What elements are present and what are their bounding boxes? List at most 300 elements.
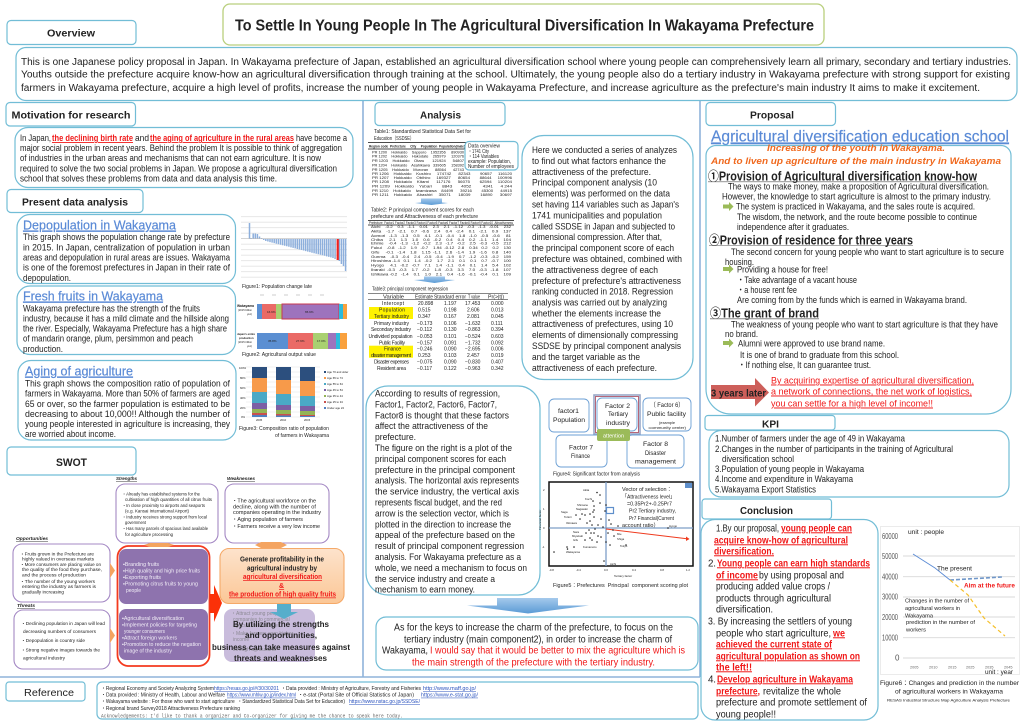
panel: analysis description: called SSDSE in Japan and subjected to bbox=[532, 220, 675, 231]
table 3: principal component regression: 0.106 bbox=[444, 321, 457, 327]
panel: SWOT strengths: ・Industry receives strong support from local bbox=[122, 514, 207, 520]
chart: prefecture principal component scoring plot: Tertiary factor bbox=[614, 574, 632, 578]
item 3: brand: ③The grant of brand bbox=[710, 306, 819, 320]
table 1: SSDSE data: PR 1205 Hokkaido Muroran 88564 42743 bbox=[372, 167, 465, 172]
table 3: principal component regression: 0.090 bbox=[444, 360, 457, 366]
panel: depopulation in Wakayama: This graph shows the population change rate by prefecture bbox=[23, 232, 230, 242]
panel: fresh fruits in Wakayama: the river. Especially, Wakayama Prefecture has a high share bbox=[23, 324, 227, 334]
panel: aging of agriculture: farmers in Wakayama. More than 50% of farmers are aged bbox=[25, 389, 230, 399]
table 3: principal component regression: 0.122 bbox=[444, 366, 457, 372]
panel: references: https://www.e-stat.go.jp/ bbox=[421, 693, 479, 699]
table 2: principal component scores: Aichi -0.2 0.3 -1.1 0.01 2.3 2.1 -1.12 -0.3 -1.3 -0.01 232 bbox=[371, 224, 512, 229]
strategy box: strengths x opportunities: ▪Exporting fruits bbox=[123, 575, 161, 581]
panel: keys to increase the charm: Wakayama, bbox=[382, 646, 428, 656]
table 2: principal component scores: Chiba 2.1 1.3 1.0 0.6 -0.2 0.4 0.4 0.2 -1.1 1.4 104 bbox=[371, 237, 512, 242]
panel: motivation text: major social problem in recent years. Behind the problem It is possible to think of aggregation bbox=[20, 143, 342, 153]
panel: conclusion text bbox=[701, 520, 878, 720]
table 3: principal component regression: −0.117 bbox=[417, 366, 432, 372]
arrow: table 1 to table 2 bbox=[415, 198, 448, 205]
factor 7 bbox=[556, 435, 607, 467]
table 3: principal component regression: Finance bbox=[384, 346, 401, 352]
chart: agricultural output value: 35.8% bbox=[268, 339, 277, 343]
table 3: principal component regression: 0.092 bbox=[491, 340, 504, 346]
panel: references: https://www.mhlw.go.jp/index.html bbox=[227, 693, 296, 699]
panel: references bbox=[97, 682, 698, 720]
heading: conclusion bbox=[702, 499, 832, 519]
panel: keys to increase the charm: tertiary industry (main component2), in order to increase the charm of bbox=[404, 634, 672, 645]
panel: conclusion text: products through agricultural bbox=[716, 593, 831, 604]
factor 1: Population bbox=[553, 417, 585, 424]
panel: conclusion text: producing added value crops / bbox=[716, 581, 830, 592]
table 3: principal component regression: 17.453 bbox=[465, 301, 481, 307]
factor 1: factor1 bbox=[558, 408, 579, 415]
table 3: principal component regression: 0.000 bbox=[491, 301, 504, 307]
panel: generate profitability: agricultural industry by bbox=[247, 566, 317, 572]
table 3: principal component regression: Variable bbox=[383, 294, 404, 300]
chart: agricultural workers prediction: Changes in the number of bbox=[905, 598, 970, 604]
table 2: principal component scores: Ishikawa -0.2 -1.4 0.1 1.0 2.1 0.4 -1.6 -0.1 -0.4 0.1 109 bbox=[371, 272, 512, 276]
panel: depopulation in Wakayama: is one of the foremost prefectures in Japan in their rate of bbox=[23, 263, 231, 273]
chart: composition ratio of farmers by age: Age 70 and older bbox=[327, 370, 348, 374]
panel: references: https://resas.go.jp/#/30/30201 bbox=[214, 686, 279, 692]
heading: present data analysis bbox=[7, 190, 143, 212]
table 2: principal component scores: Gifu -0.1 -1.4 1.8 1.15 -1.1 2.6 -1.4 1.9 -1.6 0.8 140 bbox=[371, 250, 512, 254]
panel: SWOT strengths: ・Has many parcels of spacious land available bbox=[122, 526, 209, 531]
panel: SWOT strengths: (e.g. Kansai International Airport) bbox=[125, 508, 190, 514]
panel: fresh fruits in Wakayama bbox=[17, 286, 236, 354]
table 3: principal component regression: Standard error bbox=[434, 294, 466, 300]
chart: composition ratio of farmers by age: 40% bbox=[240, 396, 246, 400]
callout: data overview: ・114 Variables bbox=[468, 154, 499, 160]
panel: conclusion text: revitalize the whole bbox=[763, 686, 842, 697]
table 3: principal component regression: disaster management bbox=[371, 353, 412, 359]
panel: regression results description: prefecture. bbox=[375, 431, 416, 442]
table 3: principal component regression: −0.173 bbox=[417, 321, 433, 327]
panel: measures against threats and weaknesses: By utilizing the strengths bbox=[233, 620, 330, 629]
chart: agricultural workers prediction: 2010 bbox=[929, 666, 937, 670]
chart: agricultural output value: 65.9% bbox=[305, 310, 314, 314]
item 1: know-how: The ways to make money, make a proposition of Agricultural diversification. bbox=[728, 181, 989, 191]
caption: figure 6: of agricultural workers in Wakayama bbox=[895, 688, 1004, 696]
heading: overview: Overview bbox=[47, 28, 95, 40]
panel: conclusion text: we bbox=[832, 628, 845, 639]
panel: SWOT weaknesses: ・Farmers receive a very low income bbox=[232, 524, 320, 530]
panel: SWOT strengths bbox=[116, 476, 218, 543]
table 3: principal component regression: 0.130 bbox=[444, 327, 457, 333]
arrow: analysis to keys bbox=[467, 598, 589, 614]
panel: regression results description: appeal of the prefecture based on the bbox=[375, 529, 515, 540]
panel: SWOT opportunities: entering the industry as farmers is bbox=[22, 584, 97, 589]
callout: data overview: Number of employees bbox=[468, 164, 514, 170]
panel: references: ・Data provided : Ministry of Health, Labour and Welfare bbox=[101, 693, 225, 699]
callout: 3 years later: a network of connections, the net work of logistics, bbox=[771, 386, 972, 398]
callout: data overview: example: Population, bbox=[468, 159, 511, 165]
table 3: principal component regression: 2.457 bbox=[467, 353, 480, 359]
panel: SWOT opportunities: the quality of the food they purchase, bbox=[22, 567, 102, 572]
panel: regression results description: whole, we need a mechanism to focus on bbox=[374, 562, 527, 573]
panel: regression results description: The figure on the right is a plot of the bbox=[375, 442, 512, 453]
table 3: principal component regression: 0.603 bbox=[491, 334, 504, 340]
heading: proposal: Proposal bbox=[750, 110, 794, 122]
panel: SWOT weaknesses: ・The agricultural workforce on the bbox=[232, 499, 316, 505]
callout: data overview: Data overview bbox=[468, 144, 500, 150]
attention tag: attention bbox=[603, 434, 624, 440]
panel: regression results description: affect the attractiveness of the bbox=[375, 420, 488, 431]
item 1: know-how: ①Provision of Agricultural diversification know-how bbox=[708, 170, 977, 184]
table 1: SSDSE data: PR 1211 Hokkaido Abashiri 35071 18039 16890 30697 bbox=[372, 192, 513, 197]
chart: prefecture principal component scoring plot: Aichi bbox=[610, 562, 616, 566]
factor 1 bbox=[549, 399, 589, 432]
item 2: residence: Are coming from by the funds which is earned in Wakayama brand. bbox=[737, 295, 967, 305]
chart: agricultural output value: 17.0% bbox=[317, 339, 326, 343]
panel: measures against threats and weaknesses: ・Attract young people to bbox=[231, 611, 288, 617]
factor 2: industry bbox=[606, 420, 631, 427]
panel: SWOT opportunities: gradually increasing bbox=[22, 590, 64, 594]
callout: 3 years later: 3 years later bbox=[711, 388, 766, 400]
chart: prefecture principal component scoring plot: Shiga bbox=[617, 537, 625, 541]
caption: table 2: Table2: P principal component scores for each bbox=[371, 208, 474, 214]
strategy box: strengths x threats: younger consumers bbox=[124, 629, 165, 635]
chart: agricultural workers prediction: 2025 bbox=[966, 666, 974, 670]
chart: agricultural workers prediction: 60000 bbox=[882, 532, 898, 541]
panel: regression results description: Factor1, Factor2, Factor6, Factor7, bbox=[375, 398, 497, 409]
chart: prefecture principal component scoring plot: 2 bbox=[543, 488, 545, 492]
chart: prefecture principal component scoring plot: -0.4 bbox=[576, 568, 581, 572]
callout: vector of selection: =0.35Pr2+-0.25Pr7 bbox=[627, 502, 672, 508]
chart: prefecture principal component scoring plot: Financial factor bbox=[538, 510, 542, 530]
chart: agricultural workers prediction: agricultural workers in bbox=[905, 606, 960, 612]
panel: fresh fruits in Wakayama: production. bbox=[23, 344, 63, 354]
panel: motivation text: have become a bbox=[296, 133, 347, 143]
panel: conclusion text: diversification. bbox=[714, 546, 774, 557]
chart: prefecture principal component scoring plot: 1.2 bbox=[686, 568, 690, 572]
table 2: principal component scores: Hiroshima -1.4 0.1 1.4 -0.2 1.7 2.1 0.1 0.1 0.7 -0.7 100 bbox=[371, 258, 512, 263]
factor 7: Finance bbox=[571, 453, 590, 460]
heading: KPI bbox=[705, 416, 835, 430]
panel: SWOT threats bbox=[14, 603, 110, 669]
chart: prefecture principal component scoring plot: Nara bbox=[573, 530, 580, 534]
heading: overview bbox=[7, 20, 136, 44]
factor 8 bbox=[627, 435, 684, 468]
panel: overview text: Youths outside the prefecture acquire know-how an agricultural diversification through training at the school. Ultimately, the young people also do a tertiary industry in Wakayama prefecture with strong support for existing bbox=[21, 70, 1010, 80]
caption: figure 3: Figure3: Composition ratio of population bbox=[239, 426, 329, 432]
chart: composition ratio of farmers by age: 80% bbox=[240, 376, 246, 380]
panel: KPI list: 1.Number of farmers under the age of 49 in Wakayama bbox=[715, 434, 905, 444]
chart: prefecture principal component scoring plot: Mie bbox=[617, 532, 622, 536]
table 3: principal component regression: −2.695 bbox=[465, 346, 481, 352]
caption: table 3: Table3: principal component regression bbox=[372, 286, 448, 292]
strategy box: strengths x threats: ▪Implement policies for targeting bbox=[122, 622, 197, 628]
table 2: principal component scores: prefecture and Attractiveness of each prefecture bbox=[371, 214, 478, 220]
table 3: principal component regression: Secondary industry bbox=[371, 327, 412, 333]
table 3: principal component regression: Primary industry bbox=[374, 321, 410, 327]
heading: SWOT: SWOT bbox=[56, 457, 87, 469]
panel: analysis description: prefecture was obtained, combined with bbox=[532, 253, 682, 264]
panel: conclusion text: 1.By our proposal, bbox=[716, 523, 779, 534]
chart: agricultural workers prediction: workers bbox=[906, 628, 927, 634]
panel: motivation text: and bbox=[135, 133, 149, 143]
table 3: principal component regression: −1.732 bbox=[465, 340, 481, 346]
caption: figure 2: Figure2: Agricultural output value bbox=[242, 352, 316, 358]
panel: SWOT threats: Threats bbox=[17, 603, 36, 608]
chart: prefecture principal component scoring plot: Kumamoto bbox=[583, 545, 597, 549]
chart: agricultural output value: Japan's entire bbox=[237, 332, 255, 336]
chart: composition ratio of farmers by age: Age 25 to 34 bbox=[327, 400, 343, 404]
table 2: principal component scores: Ibaraki -0.3 -0.3 1.7 -0.2 1.8 -0.3 3.3 7.0 -0.3 -1.8 107 bbox=[371, 267, 512, 272]
panel: SWOT opportunities bbox=[13, 536, 110, 602]
table 3: principal component regression: Estimate bbox=[415, 294, 433, 300]
chart: agricultural workers prediction: 2045 bbox=[1004, 666, 1012, 670]
chart: composition ratio of farmers by age: 100% bbox=[239, 366, 247, 370]
factor 6: Public facility bbox=[647, 411, 687, 418]
panel: SWOT opportunities: Opportunities bbox=[16, 536, 49, 541]
item 3: brand: Alumni were approved to use brand name. bbox=[738, 338, 885, 348]
panel: conclusion text: Young people can earn high standards bbox=[717, 558, 870, 569]
heading: analysis bbox=[375, 102, 505, 126]
panel: SWOT opportunities: ・The number of the young workers bbox=[20, 579, 96, 584]
chart: agricultural output value: Wakayama bbox=[237, 304, 254, 308]
panel: analysis description: 1741 municipalities and population bbox=[532, 209, 662, 220]
table 3: principal component regression: Resident area bbox=[377, 366, 406, 372]
heading: fresh fruits: Fresh fruits in Wakayama bbox=[23, 288, 164, 304]
panel: analysis description: Here we conducted a series of analyzes bbox=[532, 144, 677, 155]
panel: conclusion text: young people can bbox=[781, 523, 852, 534]
aim statement bbox=[710, 143, 1001, 167]
heading: agricultural diversification education school: Agricultural diversification education school bbox=[711, 128, 1009, 146]
panel: regression results description: the service industry and create a bbox=[375, 573, 496, 584]
item 3: brand: ・If nothing else, It can guarantee trust. bbox=[738, 360, 871, 370]
panel: conclusion text: prefecture and promote settlement of bbox=[716, 697, 867, 708]
panel: analysis description: attractiveness of prefectures, using 10 bbox=[532, 318, 673, 329]
chart: prefecture principal component scoring plot: -1 bbox=[542, 545, 545, 549]
panel: regression results description: analysis. For Wakayama prefecture as a bbox=[375, 551, 522, 562]
chart: composition ratio of farmers by age: Age 35 to 44 bbox=[327, 394, 343, 398]
panel: measures against threats and weaknesses: companies to commercial bbox=[233, 617, 290, 623]
table 3: principal component regression: −0.963 bbox=[465, 366, 481, 372]
chart: agricultural workers prediction: 10000 bbox=[882, 634, 898, 643]
aim statement: Increasing of the youth in Wakayama. bbox=[767, 143, 945, 154]
caption: figure 6: Figure6：Changes and prediction in the number bbox=[880, 680, 1019, 687]
chart: prefecture principal component scoring plot: Miyazaki bbox=[572, 534, 583, 538]
panel: conclusion text: Develop agriculture in Wakayama bbox=[717, 674, 853, 685]
chart: agricultural workers prediction: Wakayama bbox=[905, 614, 933, 620]
arrow: blue down arrow bbox=[270, 604, 298, 619]
table 1: SSDSE data: PR 1210 Hokkaido Iwamizawa 84499 39216 45300 44915 bbox=[372, 188, 513, 193]
panel: measures against threats and weaknesses: agricultural industries bbox=[233, 623, 281, 629]
chart: prefecture principal component scoring plot: Gifu bbox=[573, 538, 579, 542]
panel: conclusion text: 3. By increasing the settlers of young bbox=[708, 616, 852, 627]
heading: KPI: KPI bbox=[762, 420, 779, 430]
panel: regression results description bbox=[366, 386, 540, 595]
table 3: principal component regression: Undivided population bbox=[368, 334, 413, 340]
chart: composition ratio of farmers by age: Age 65 to 74 bbox=[327, 376, 343, 380]
panel: aging of agriculture: are worried about income. bbox=[25, 429, 116, 439]
panel: conclusion text: diversification. bbox=[716, 604, 773, 615]
heading: SWOT bbox=[7, 447, 136, 475]
panel: regression results description: prefecture in the principal component bbox=[375, 464, 515, 475]
table 2: principal component scores: Ehime -0.4 -1.3 -1.2 -0.2 2.3 -1.7 -0.2 2.5 -0.3 -0.5 212 bbox=[371, 241, 512, 246]
panel: conclusion text: agricultural population as shown on bbox=[716, 651, 860, 662]
chart: composition ratio of farmers by age: 2015 bbox=[304, 418, 311, 422]
item 1: know-how: The wisdom, the network, and the route become possible to continue bbox=[737, 212, 977, 222]
chart: agricultural output value: (2015 billion bbox=[238, 308, 253, 312]
panel: references: ・Data provided : Ministry of Agriculture, Forestry and Fisheries bbox=[281, 686, 421, 692]
panel: measures against threats and weaknesses: and opportunities, bbox=[245, 631, 317, 640]
chart: composition ratio of farmers by age: 0% bbox=[241, 415, 246, 419]
panel: analysis description: SSDSE by principal component analysis bbox=[532, 340, 681, 351]
table 3: principal component regression: 0.198 bbox=[444, 308, 457, 314]
panel: keys to increase the charm: As for the keys to increase the charm of the prefecture, to focus on the bbox=[394, 622, 674, 633]
panel: SWOT threats: agricultural industry bbox=[23, 656, 66, 660]
table 1: SSDSE data: PR 1209 Hokkaido Yubari 8843 4052 4341 4 244 bbox=[372, 184, 513, 188]
table 3: principal component regression: 0.394 bbox=[491, 327, 504, 333]
panel: SWOT weaknesses bbox=[225, 476, 329, 543]
callout: vector of selection: Pr2 Tertiary industry, bbox=[629, 508, 676, 514]
chart: agricultural workers prediction bbox=[880, 526, 1020, 676]
panel: analysis description: set having 114 variables such as Japan's bbox=[532, 198, 679, 210]
panel: analysis description: prefecture of prefecture's attractiveness bbox=[532, 275, 681, 286]
panel: KPI list: diversification school bbox=[722, 454, 794, 464]
factor 6: （ Factor 6） bbox=[650, 401, 684, 409]
panel: regression results description: result of principal component regression bbox=[375, 540, 524, 551]
chart: prefecture principal component scoring plot: Okinawa bbox=[566, 521, 577, 525]
table 3: principal component regression: 0.090 bbox=[444, 346, 457, 352]
panel: depopulation in Wakayama: areas and depopulation in rural areas are issues. Wakayama bbox=[23, 252, 230, 262]
caption: table 1: Table1: Standardized Statistical Data Set for bbox=[374, 129, 471, 135]
panel: overview text bbox=[16, 48, 1017, 100]
table 3: principal component regression: 2.081 bbox=[467, 314, 480, 320]
table 2: principal component scores: Prefecture Factor1 Factor2 Factor3 Factor4 Factor5 Factor6 Factor7 Factor8 Factor9 Factor10 Attractiveness bbox=[369, 221, 513, 225]
chart: prefecture principal component scoring plot: Akita bbox=[583, 488, 590, 492]
table 3: principal component regression: 0.045 bbox=[491, 314, 504, 320]
chart: agricultural output value: 16.9% bbox=[267, 310, 276, 314]
table 3: principal component regression: 0.253 bbox=[418, 353, 431, 359]
factor 8: management bbox=[635, 458, 676, 466]
table 3: principal component regression: 0.019 bbox=[491, 353, 504, 359]
chart: composition ratio of farmers by age: Under age 24 bbox=[327, 406, 344, 410]
panel: SWOT strengths: government bbox=[125, 520, 147, 525]
panel: regression results description: plotted in the direction to increase the bbox=[375, 518, 511, 529]
panel: KPI list: 5.Wakayama Export Statistics bbox=[715, 484, 816, 494]
table 3: principal component regression: 0.167 bbox=[444, 314, 457, 320]
factor 8: Factor 8 bbox=[643, 441, 668, 448]
panel: generate profitability: agricultural diversification bbox=[243, 574, 322, 581]
panel: aging of agriculture: 65 or over, so the farmer population is estimated to be bbox=[25, 399, 230, 409]
chart: agricultural workers prediction: Aim at the future bbox=[964, 582, 1015, 590]
panel: SWOT opportunities: and the process of production bbox=[22, 572, 86, 578]
item 1: know-how: independence after it graduates. bbox=[737, 222, 849, 232]
panel: regression results description: arrow is the selection vector, which is bbox=[375, 507, 509, 518]
table 3: principal component regression: 1.197 bbox=[444, 301, 457, 307]
chart: prefecture principal component scoring plot: Tottori bbox=[564, 515, 572, 519]
chart: agricultural output value: production bbox=[239, 336, 254, 340]
item 2: residence: Providing a house for free! bbox=[737, 264, 828, 274]
panel: SWOT weaknesses: ・Aging population of farmers bbox=[232, 517, 304, 523]
panel: measures against threats and weaknesses bbox=[212, 604, 350, 663]
table 3: principal component regression: Pr(>|t|) bbox=[488, 294, 504, 300]
panel: analysis description: the principal component score of each bbox=[532, 242, 674, 253]
panel: conclusion text: the left!! bbox=[716, 662, 752, 673]
chart: prefecture principal component scoring plot: -0.8 bbox=[549, 568, 554, 572]
chart: agricultural workers prediction: The present bbox=[937, 566, 972, 572]
chart: agricultural workers prediction: 2015 bbox=[948, 666, 956, 670]
table 1: SSDSE data: Education（SSDSE） bbox=[374, 135, 414, 142]
chart: prefecture principal component scoring plot: 0 bbox=[543, 526, 545, 530]
table 2: principal component scores bbox=[368, 208, 514, 276]
chart: agricultural output value: yen) bbox=[247, 344, 252, 348]
chart: agricultural workers prediction: 20000 bbox=[882, 613, 898, 622]
chart: prefecture principal component scoring plot: 0.0 bbox=[604, 568, 608, 572]
panel: conclusion text: achieved the current state of bbox=[716, 639, 833, 650]
panel: motivation text: of industries in the urban areas and mechanisms that can not earn agriculture. It is now bbox=[20, 153, 322, 163]
factor 6: :community center) bbox=[648, 426, 686, 430]
panel: SWOT opportunities: ・More consumers are placing value on bbox=[20, 562, 101, 567]
table 2: principal component scores: Aomori -1.3 -1.3 0.5 4.1 -0.1 -0.4 1.8 -1.0 -0.5 -0.6 81 bbox=[371, 233, 512, 238]
panel: proposal details bbox=[706, 143, 1011, 414]
heading: reference bbox=[6, 682, 85, 701]
panel: fresh fruits in Wakayama: of mandarin orange, plum, persimmon and peach bbox=[23, 334, 193, 344]
factor 2 bbox=[594, 395, 640, 434]
panel: analysis description: attractiveness of the prefecture. bbox=[532, 166, 651, 177]
panel: SWOT weaknesses: companies operating in the industry bbox=[233, 510, 322, 516]
chart: agricultural workers prediction: 2005 bbox=[910, 666, 918, 670]
chart: agricultural output value: 27.9% bbox=[296, 339, 305, 343]
panel: references: ・Wakayama website : For those who want to start agriculture ・Standardized Statistical Data Set for Education) bbox=[101, 699, 345, 705]
panel: conclusion text: acquire know-how of agricultural bbox=[714, 535, 848, 546]
callout: 3 years later: By acquiring expertise of agricultural diversification, bbox=[771, 376, 974, 386]
panel: references: https://www.nstac.go.jp/SSDSE/ bbox=[349, 699, 421, 705]
table 3: principal component regression: 2.606 bbox=[467, 308, 480, 314]
panel: motivation text: required to solve the two social problems in Japan. We propose a agricultural diversification bbox=[20, 164, 337, 174]
table 3: principal component regression: −1.632 bbox=[465, 321, 481, 327]
chart: agricultural workers prediction: 2035 bbox=[985, 666, 993, 670]
caption: figure 6 bbox=[880, 680, 1019, 702]
item 2: residence: ・a house rent fee bbox=[737, 285, 797, 295]
panel: aging of agriculture bbox=[18, 360, 236, 440]
chart: population change rate by prefecture bbox=[241, 217, 347, 290]
panel: conclusion text: 4. bbox=[708, 674, 716, 685]
panel: SWOT strengths: ・In close proximity to airports and seaports bbox=[122, 503, 206, 508]
panel: conclusion text: prefecture, bbox=[716, 686, 760, 697]
item 1: know-how: The system is practiced in Wakayama, and the sales route is acquired. bbox=[736, 202, 975, 212]
panel: motivation text: the aging of agriculture in the rural areas bbox=[150, 133, 294, 143]
callout: data overview: ・1741 City bbox=[468, 149, 489, 155]
panel: overview text: This is one Japanese policy proposal in Japan. In Wakayama prefecture of Japan, established an agricultural diversification school where young people can comprehensively learn all primary, secondary and tertiary industries. bbox=[21, 57, 1011, 68]
chart: agricultural workers prediction: unit : year bbox=[985, 670, 1013, 676]
panel: fresh fruits in Wakayama: Wakayama prefecture has the strength of the fruits bbox=[23, 303, 201, 313]
panel: keys to increase the charm: the main strength of the prefecture with the tertiary industry. bbox=[412, 657, 655, 668]
attention tag bbox=[597, 429, 630, 441]
caption: figure 5: Figure5：Prefectures Principal component scoring plot bbox=[553, 583, 689, 589]
chart: prefecture principal component scoring plot: Wakayama bbox=[566, 550, 580, 554]
table 3: principal component regression: 0.407 bbox=[491, 360, 504, 366]
factor 2: Tertiary bbox=[608, 411, 629, 418]
table 2: principal component scores: Akita -1.7 -2.1 0.7 -0.6 2.4 0.4 -2.4 0.1 -2.1 0.9 137 bbox=[371, 228, 512, 234]
strategy box: strengths x threats: ▪Agricultural diversification bbox=[122, 616, 184, 622]
panel: references: http://www.maff.go.jp/ bbox=[423, 686, 477, 692]
table 3: principal component regression: −0.830 bbox=[465, 360, 481, 366]
chart: agricultural workers prediction: 30000 bbox=[882, 593, 898, 602]
panel: analysis description bbox=[522, 136, 693, 380]
heading: present data analysis: Present data analysis bbox=[22, 196, 128, 208]
table 3: principal component regression: 0.006 bbox=[491, 346, 504, 352]
panel: measures against threats and weaknesses: income bbox=[233, 637, 249, 643]
table 3: principal component regression bbox=[368, 286, 508, 372]
arrow: red arrow toward result bbox=[210, 585, 222, 622]
panel: depopulation in Wakayama: depopulation. bbox=[23, 273, 71, 283]
table 3: principal component regression: 0.347 bbox=[418, 314, 431, 320]
panel: SWOT strengths: ・Already has established systems for the bbox=[122, 492, 201, 496]
